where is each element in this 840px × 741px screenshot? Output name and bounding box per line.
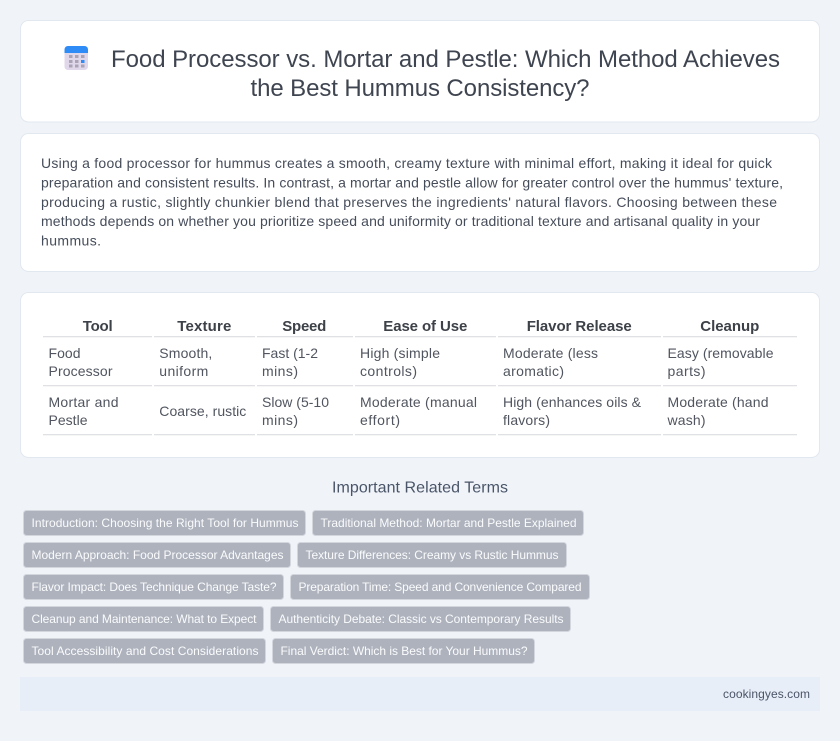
text block: introduction paragraph: hummus. [41, 232, 101, 248]
table row: mortar and pestle: wash) [666, 412, 706, 428]
table row: food processor: aromatic) [503, 363, 564, 379]
table row: mortar and pestle: Moderate (hand [668, 394, 768, 410]
panel: introduction text [20, 134, 820, 272]
tag [24, 606, 264, 632]
panel: comparison table [20, 292, 820, 458]
title: Food Processor vs. Mortar and Pestle: Which Method Achieves [111, 46, 780, 73]
tag: Cleanup and Maintenance: What to Expect [32, 612, 257, 626]
text block: introduction paragraph: methods depends on whether you prioritize speed and uniformity or traditional texture and artisanal quality in your [41, 213, 760, 229]
tag [24, 542, 290, 568]
tag [298, 542, 566, 568]
tag: Traditional Method: Mortar and Pestle Explained [320, 516, 576, 530]
table header row: Texture [177, 318, 231, 335]
table header row [83, 318, 759, 335]
table header row: Speed [282, 318, 326, 335]
table row: mortar and pestle: Moderate (manual [360, 394, 477, 410]
text block: introduction paragraph: producing a rustic, slightly chunkier blend that preserves the ingredients' natural flavors. Choosing between these [41, 194, 777, 210]
tag [290, 574, 590, 600]
table row: mortar and pestle [48, 394, 768, 428]
tag [312, 510, 584, 536]
panel: title header [20, 20, 820, 122]
table row: food processor: Easy (removable [668, 345, 774, 361]
table header row: Tool [83, 318, 113, 335]
table row: mortar and pestle: effort) [360, 412, 400, 428]
tag list: related terms [24, 510, 590, 664]
table header row: Flavor Release [527, 318, 632, 335]
table header row: Cleanup [700, 318, 759, 335]
table row: food processor: mins) [262, 363, 298, 379]
table row: mortar and pestle: Coarse, rustic [159, 403, 246, 419]
tag [24, 638, 266, 664]
tag: Preparation Time: Speed and Convenience Compared [298, 580, 582, 594]
table row: food processor: High (simple [360, 345, 440, 361]
table row: food processor: Processor [48, 363, 113, 379]
heading: important related terms: Important Related Terms [332, 480, 508, 497]
icon: calendar [64, 46, 88, 70]
table row: food processor: Food [48, 345, 80, 361]
table row: mortar and pestle: Slow (5-10 [262, 394, 329, 410]
tag [272, 638, 534, 664]
footer bar: cookingyes.com [723, 687, 810, 701]
table header row: Ease of Use [383, 318, 467, 335]
title [111, 46, 780, 102]
tag [270, 606, 570, 632]
tag: Modern Approach: Food Processor Advantages [32, 548, 284, 562]
table row: mortar and pestle: Pestle [48, 412, 88, 428]
table row: mortar and pestle: flavors) [503, 412, 550, 428]
table row: food processor: uniform [159, 363, 208, 379]
tag: Final Verdict: Which is Best for Your Hummus? [280, 644, 528, 658]
title: the Best Hummus Consistency? [250, 75, 590, 102]
table row: food processor: Smooth, [159, 345, 212, 361]
table row: food processor: parts) [668, 363, 706, 379]
tag: Tool Accessibility and Cost Considerations [32, 644, 258, 658]
table row: food processor: controls) [360, 363, 417, 379]
table row: mortar and pestle: Mortar and [48, 394, 118, 410]
tag: Flavor Impact: Does Technique Change Taste? [32, 580, 277, 594]
text block: introduction paragraph [41, 155, 783, 248]
table row: mortar and pestle: mins) [262, 412, 298, 428]
table row: mortar and pestle: High (enhances oils & [503, 394, 642, 410]
table row: food processor: Moderate (less [503, 345, 598, 361]
text block: introduction paragraph: Using a food processor for hummus creates a smooth, creamy texture with minimal effort, making it ideal for quick [41, 155, 773, 171]
text block: introduction paragraph: preparation and consistent results. In contrast, a mortar and pestle allow for greater control over the hummus' texture, [41, 174, 783, 190]
tag: Texture Differences: Creamy vs Rustic Hummus [306, 548, 558, 562]
table row: food processor [48, 345, 774, 379]
tag [24, 574, 284, 600]
footer bar [20, 677, 820, 711]
tag: Authenticity Debate: Classic vs Contemporary Results [278, 612, 564, 626]
tag [24, 510, 306, 536]
table row: food processor: Fast (1-2 [262, 345, 318, 361]
tag: Introduction: Choosing the Right Tool for Hummus [32, 516, 298, 530]
